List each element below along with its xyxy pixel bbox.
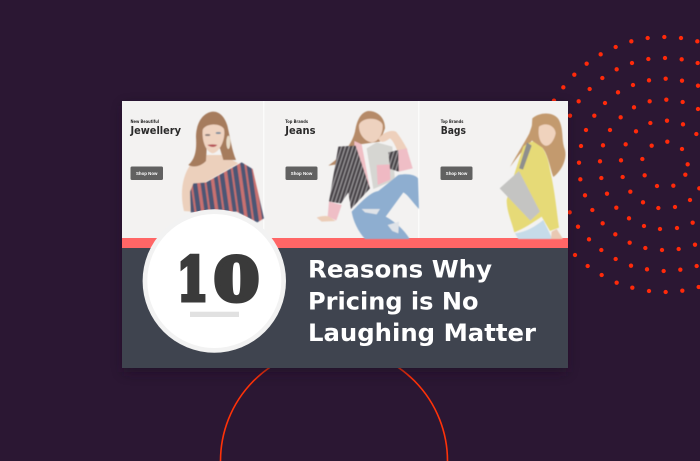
panel dividers <box>263 101 419 238</box>
panel: bags text: Bags <box>441 125 466 137</box>
panel: jeans button <box>286 166 318 180</box>
title: Reasons Why <box>308 256 492 284</box>
title <box>308 256 536 347</box>
panel: bags text <box>441 119 466 137</box>
grey underline bar <box>190 312 239 317</box>
dark title band <box>122 248 568 368</box>
decorative dot pattern <box>552 35 700 294</box>
panel: jewellery button <box>130 166 163 180</box>
pink strip <box>122 238 568 248</box>
number 10 <box>177 245 259 314</box>
title: Laughing Matter <box>308 319 536 347</box>
panel: jewellery text: New Beautiful <box>130 119 159 125</box>
number 10: 0 <box>214 245 259 314</box>
panel: jewellery text <box>130 119 181 137</box>
panel: jewellery button: Shop Now <box>136 171 158 176</box>
panel: jewellery text: Jewellery <box>130 125 181 137</box>
panel: jeans text: Top Brands <box>285 119 308 125</box>
panel: jeans model <box>317 111 419 239</box>
card <box>122 101 568 368</box>
panel: bags button <box>440 166 472 180</box>
number badge <box>143 209 286 353</box>
product banner panel <box>122 101 568 238</box>
card shadow <box>124 106 566 372</box>
panel: jeans text <box>284 119 316 137</box>
panel: bags model <box>500 114 565 239</box>
panel: jeans button: Shop Now <box>291 171 313 176</box>
panel: jewellery model <box>182 112 264 222</box>
panel: bags text: Top Brands <box>441 119 464 125</box>
title: Pricing is No <box>308 287 478 315</box>
panel: bags button: Shop Now <box>446 171 468 176</box>
red circle outline <box>220 347 448 461</box>
number 10: 1 <box>177 245 208 314</box>
panel: jeans text: Jeans <box>284 125 316 137</box>
